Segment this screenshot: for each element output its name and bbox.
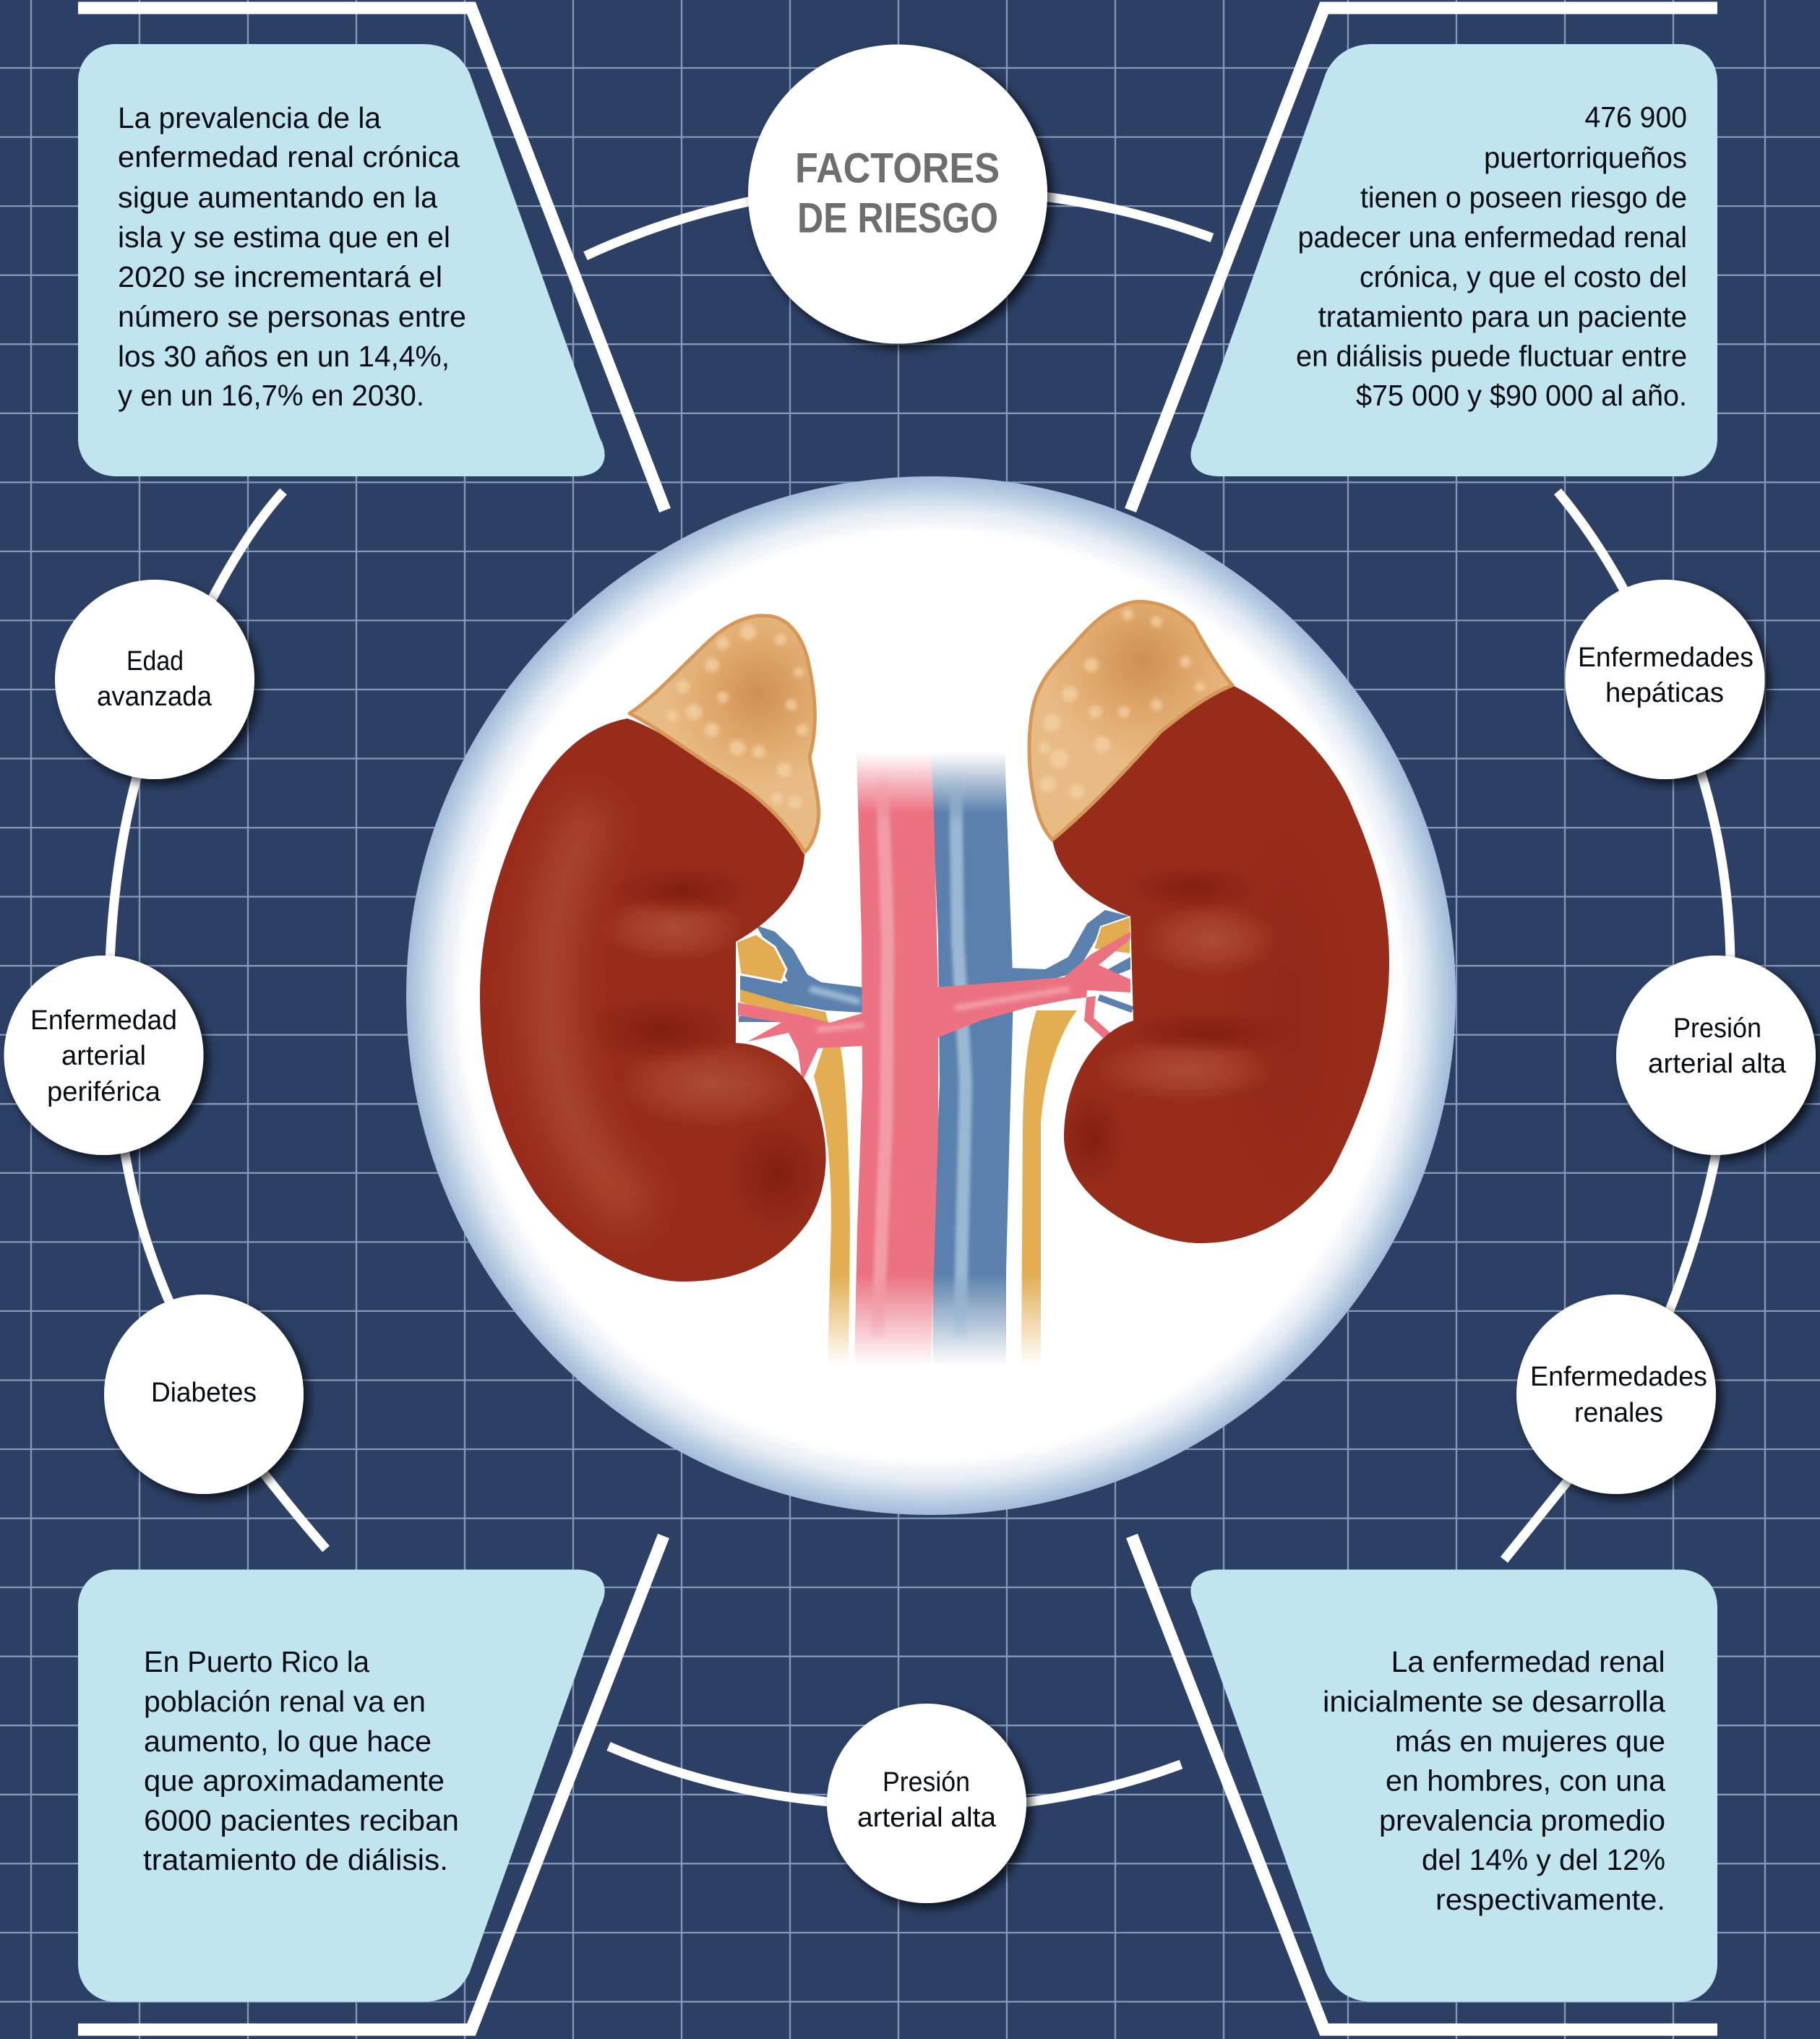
factor: enfermedad arterial periférica [4, 956, 204, 1155]
vessel: vena cava highlight [956, 766, 966, 1337]
panel: dialysis text card [78, 1570, 605, 2002]
vessel: right ureter [1021, 1010, 1077, 1366]
factor: edad avanzada [55, 580, 254, 779]
panel: cost text card [1190, 44, 1717, 476]
text: prevalence: sigue aumentando en la [118, 181, 437, 214]
text: gender prevalence: en hombres, con una [1386, 1764, 1665, 1798]
text: prevalence: La prevalencia de la [118, 101, 381, 134]
factor: presión arterial alta (bottom) [827, 1704, 1026, 1903]
factor: enfermedades renales [1516, 1295, 1716, 1494]
text: prevalence: 2020 se incrementará el [118, 260, 442, 293]
left kidney [480, 718, 828, 1282]
text: cost [1296, 100, 1687, 412]
vessel: aorta highlight [877, 766, 888, 1337]
factor: enfermedad arterial periférica: arterial [61, 1041, 146, 1071]
title badge: factores de riesgo: DE RIESGO [797, 195, 998, 241]
text: cost: $75 000 y $90 000 al año. [1356, 379, 1687, 412]
text: gender prevalence: más en mujeres que [1395, 1725, 1665, 1758]
factor: enfermedades hepáticas [1566, 580, 1765, 779]
text: cost: 476 900 [1584, 100, 1687, 134]
text: prevalence [118, 101, 466, 412]
factor: edad avanzada: Edad [126, 646, 184, 677]
text: cost: puertorriqueños [1484, 141, 1687, 174]
title badge: factores de riesgo: FACTORES [795, 145, 1000, 192]
central disc with kidney illustration [406, 476, 1456, 1515]
text: cost: tienen o poseen riesgo de [1360, 181, 1687, 214]
vessels: artery highlight [817, 989, 1070, 1030]
factor: presión arterial alta (right): arterial alta [1648, 1049, 1787, 1079]
left adrenal gland [630, 616, 819, 852]
text: dialysis: aumento, lo que hace [144, 1725, 432, 1758]
text: gender prevalence [1323, 1645, 1665, 1916]
vessels: renal veins and hilum [736, 910, 1133, 1023]
text: dialysis: población renal va en [144, 1685, 426, 1718]
text: dialysis: que aproximadamente [144, 1764, 445, 1798]
right adrenal gland [1029, 601, 1232, 840]
panel: prevalence text card [78, 44, 605, 476]
factor: presión arterial alta (right): Presión [1673, 1013, 1761, 1044]
factor: enfermedades renales: Enfermedades [1530, 1362, 1707, 1392]
title badge: factores de riesgo [748, 45, 1047, 344]
factor: enfermedad arterial periférica: periférica [47, 1077, 161, 1107]
panel: gender prevalence text card [1190, 1570, 1717, 2002]
text: prevalence: y en un 16,7% en 2030. [118, 379, 424, 412]
frame line: top right [1130, 8, 1717, 510]
text: gender prevalence: prevalencia promedio [1379, 1804, 1665, 1837]
text: gender prevalence: inicialmente se desarrolla [1323, 1685, 1665, 1718]
vessel: aorta [854, 752, 938, 1366]
factor: presión arterial alta (bottom): arterial alta [857, 1803, 997, 1833]
text: prevalence: número se personas entre [118, 300, 466, 333]
text: cost: en diálisis puede fluctuar entre [1296, 340, 1687, 373]
frame line: bottom right [1132, 1536, 1717, 2030]
factor: enfermedades hepáticas: hepáticas [1605, 678, 1724, 708]
factor: enfermedades hepáticas: Enfermedades [1578, 643, 1754, 673]
frame line: bottom left [78, 1536, 664, 2030]
connector ring arcs [110, 197, 1730, 1803]
frame line: top left [78, 8, 665, 510]
text: dialysis: tratamiento de diálisis. [143, 1843, 448, 1876]
text: cost: tratamiento para un paciente [1318, 300, 1687, 333]
right kidney [1052, 685, 1389, 1243]
text: gender prevalence: del 14% y del 12% [1422, 1843, 1665, 1876]
factor: diabetes: Diabetes [151, 1378, 257, 1408]
text: gender prevalence: respectivamente. [1435, 1883, 1665, 1916]
factor: edad avanzada: avanzada [97, 682, 213, 712]
vessels: renal arteries [738, 932, 1130, 1081]
text: dialysis: 6000 pacientes reciban [144, 1804, 459, 1837]
text: prevalence: los 30 años en un 14,4%, [118, 340, 450, 373]
factor: presión arterial alta (right) [1616, 956, 1816, 1155]
text: prevalence: enfermedad renal crónica [118, 140, 460, 173]
factor: enfermedad arterial periférica: Enfermedad [30, 1005, 177, 1036]
vessel: left ureter [814, 1041, 850, 1366]
text: prevalence: isla y se estima que en el [118, 220, 450, 254]
factor: enfermedades renales: renales [1574, 1398, 1663, 1428]
text: cost: crónica, y que el costo del [1360, 260, 1687, 293]
factor: diabetes [104, 1295, 304, 1494]
text: gender prevalence: La enfermedad renal [1391, 1645, 1665, 1678]
text: cost: padecer una enfermedad renal [1298, 220, 1687, 254]
vessel: vena cava [930, 752, 1013, 1366]
text: dialysis [143, 1645, 459, 1876]
text: dialysis: En Puerto Rico la [144, 1645, 369, 1678]
factor: presión arterial alta (bottom): Presión [883, 1767, 970, 1798]
